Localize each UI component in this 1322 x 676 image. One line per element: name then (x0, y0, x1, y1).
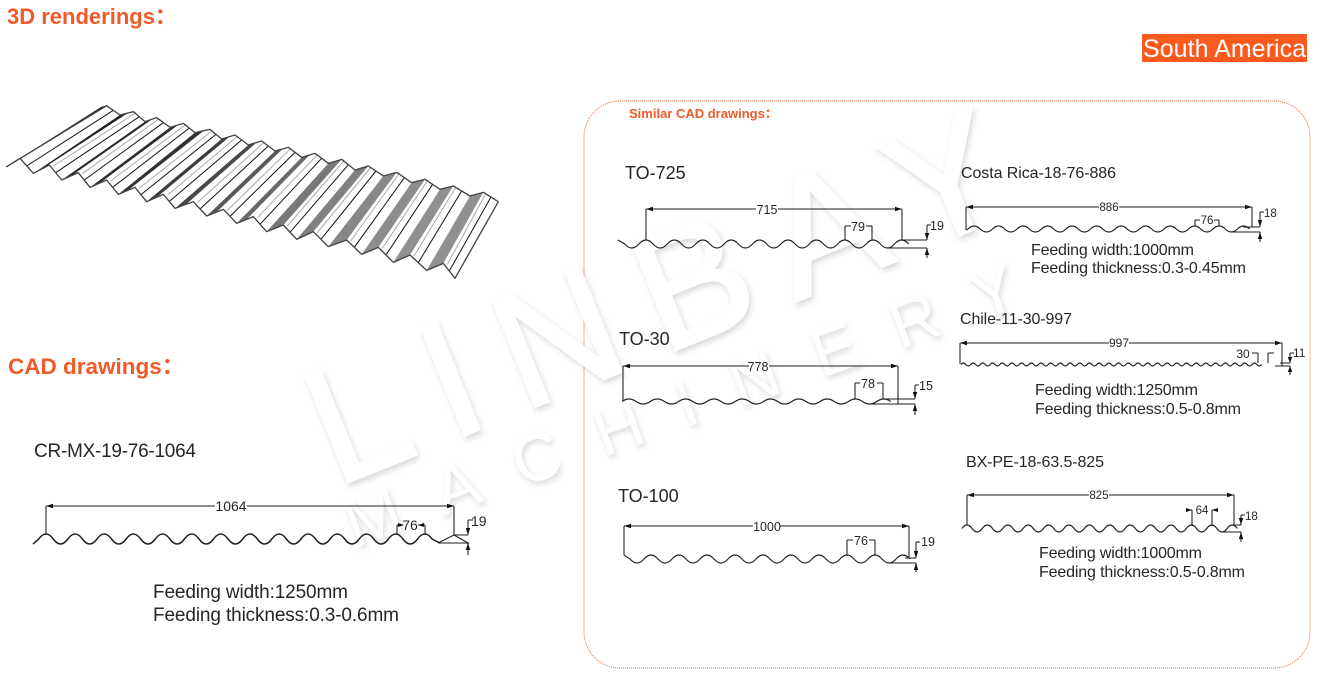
drawing: TO-100: 19 (921, 535, 935, 549)
drawing: Costa Rica-18-76-886: Feeding thickness:0.3-0.45mm (1031, 260, 1246, 277)
drawing: TO-30: TO-30 (619, 329, 670, 349)
drawing: TO-30 (619, 329, 933, 415)
drawing: Chile-11-30-997: 11 (1293, 346, 1306, 360)
drawing: CR-MX-19-76-1064: 1064 (215, 498, 247, 514)
drawing: TO-30: 78 (861, 377, 875, 391)
drawing: Costa Rica-18-76-886: 76 (1201, 215, 1213, 227)
drawing: CR-MX-19-76-1064: Feeding thickness:0.3-0.6mm (153, 605, 399, 626)
badge: South America: South America (1143, 35, 1306, 63)
drawing: CR-MX-19-76-1064: CR-MX-19-76-1064 (34, 441, 196, 462)
drawing: Chile-11-30-997: Chile-11-30-997 (960, 311, 1072, 328)
drawing: TO-30: 15 (919, 379, 933, 393)
watermark: LINBAY MACHINERY: MACHINERY (334, 249, 1027, 561)
drawing: TO-725: 715 (757, 203, 777, 217)
drawing: Chile-11-30-997: 997 (1109, 336, 1129, 350)
drawing: BX-PE-18-63.5-825: 18 (1245, 511, 1258, 523)
drawing: BX-PE-18-63.5-825 (962, 454, 1258, 581)
3D rendering of corrugated sheet (7, 106, 498, 278)
watermark: LINBAY MACHINERY: LINBAY (280, 74, 1031, 519)
drawing: BX-PE-18-63.5-825: BX-PE-18-63.5-825 (966, 454, 1104, 471)
drawing: Costa Rica-18-76-886: 886 (1099, 202, 1119, 214)
heading: similar CAD drawings: Similar CAD drawings： (629, 106, 778, 121)
drawing: Chile-11-30-997: 30 (1236, 347, 1250, 361)
drawing: Chile-11-30-997: Feeding thickness:0.5-0.8mm (1035, 401, 1241, 418)
drawing: BX-PE-18-63.5-825: 825 (1089, 490, 1109, 502)
drawing: TO-725: 19 (930, 219, 944, 233)
drawing: TO-725: TO-725 (625, 163, 686, 183)
drawing: Chile-11-30-997: Feeding width:1250mm (1035, 382, 1198, 399)
drawing: TO-30: 778 (748, 360, 768, 374)
drawing: TO-100 (618, 486, 935, 572)
drawing: CR-MX-19-76-1064: 19 (471, 513, 487, 529)
heading: CAD drawings: CAD drawings： (8, 354, 184, 379)
drawing: TO-100: 76 (854, 534, 868, 548)
drawing: TO-725: 79 (851, 220, 865, 234)
drawing: TO-100: 1000 (753, 520, 781, 534)
drawing: TO-725 (618, 163, 944, 258)
drawing: Chile-11-30-997 (960, 311, 1306, 418)
drawing: CR-MX-19-76-1064: 76 (402, 517, 418, 533)
drawing: TO-100: TO-100 (618, 486, 679, 506)
drawing: Costa Rica-18-76-886: 18 (1264, 208, 1277, 220)
drawing: BX-PE-18-63.5-825: 64 (1196, 505, 1209, 517)
drawing: BX-PE-18-63.5-825: Feeding thickness:0.5-0.8mm (1039, 564, 1245, 581)
drawing: CR-MX-19-76-1064: Feeding width:1250mm (153, 582, 348, 603)
panel: similar CAD drawings frame (584, 101, 1310, 668)
drawing: Costa Rica-18-76-886 (961, 165, 1277, 277)
drawing: Costa Rica-18-76-886: Costa Rica-18-76-886 (961, 165, 1116, 182)
drawing: CR-MX-19-76-1064 (33, 441, 487, 626)
drawing: Costa Rica-18-76-886: Feeding width:1000mm (1031, 242, 1194, 259)
heading: 3D renderings: 3D renderings： (7, 4, 177, 29)
drawing: BX-PE-18-63.5-825: Feeding width:1000mm (1039, 545, 1202, 562)
